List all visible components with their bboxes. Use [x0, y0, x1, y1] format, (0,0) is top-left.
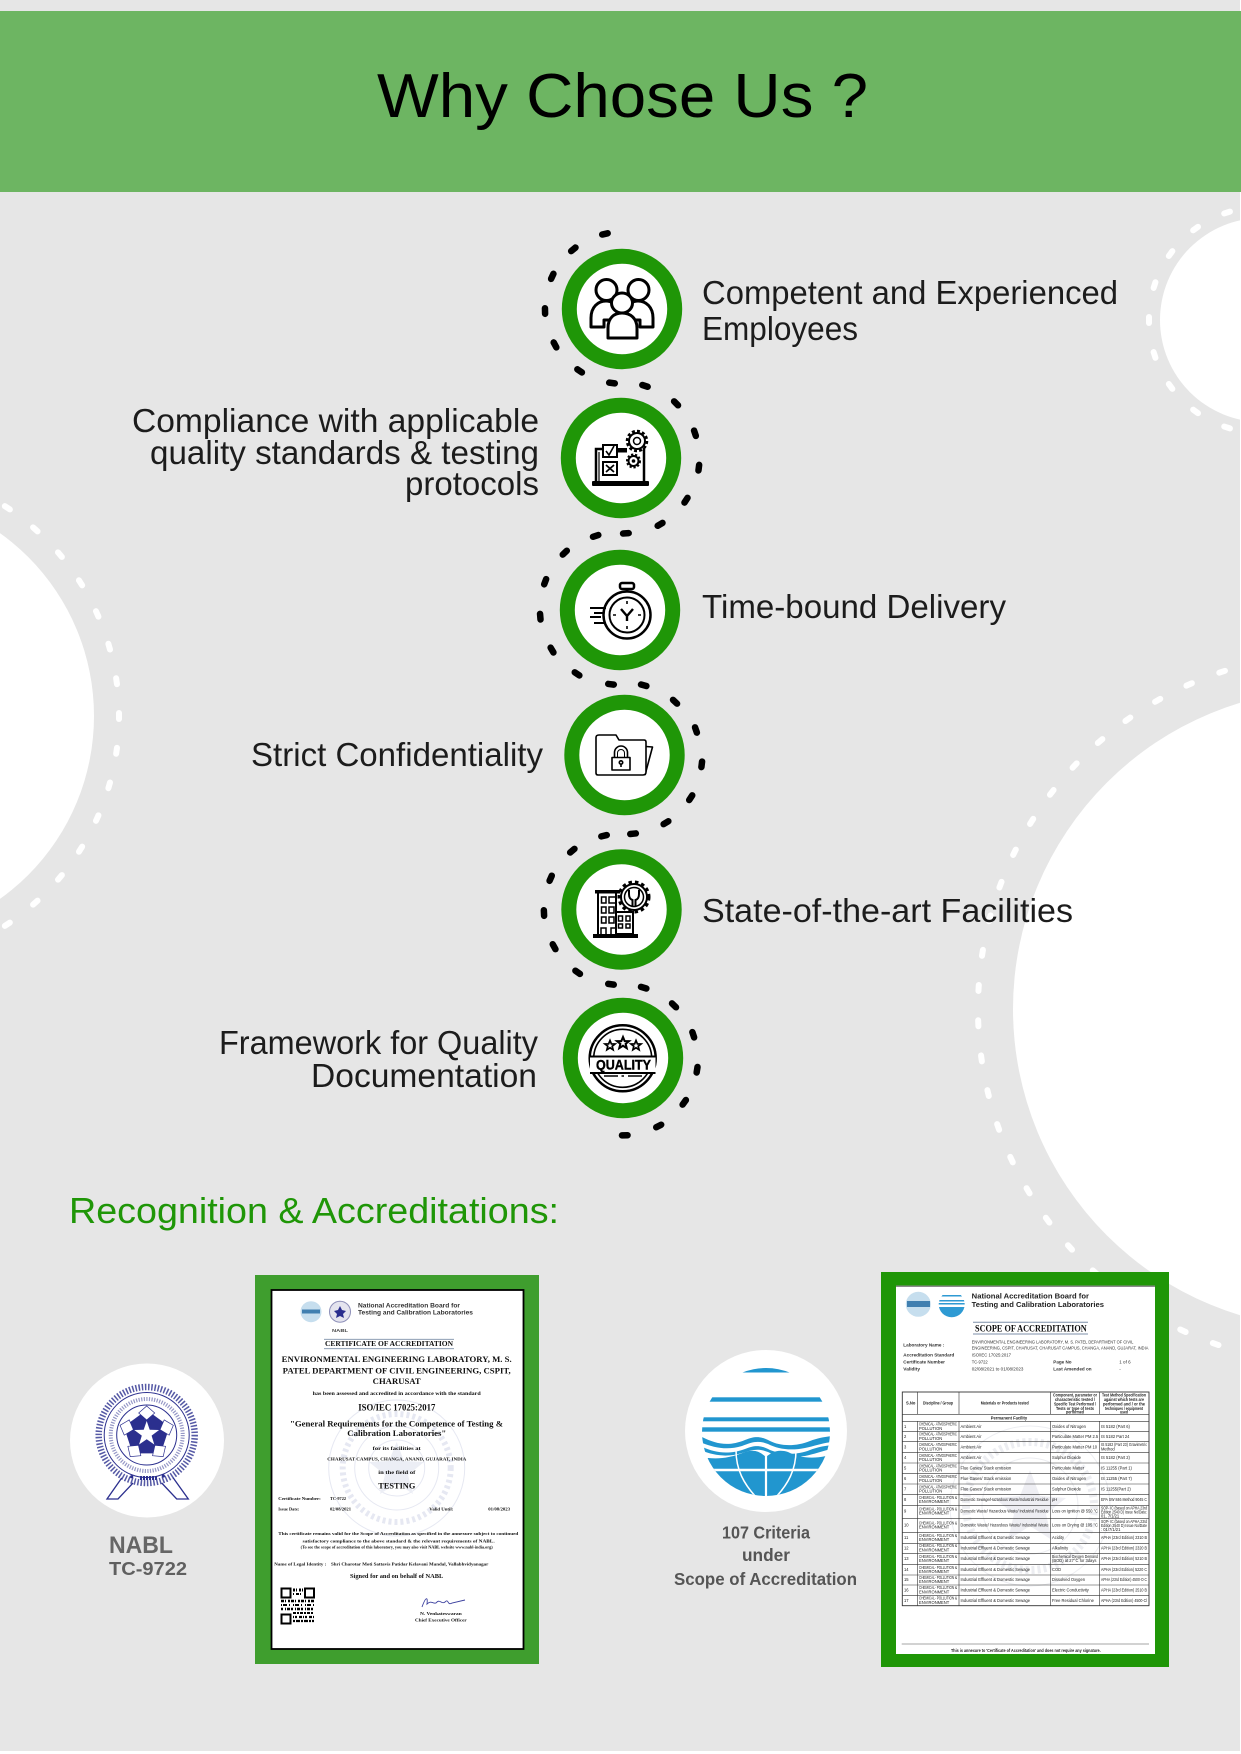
- document table: Industrial Effluent & Domestic Sewage: [960, 1556, 1031, 1561]
- item 6: framework for quality documentation: [219, 987, 698, 1135]
- document table: ENVIRONMENT: [919, 1569, 950, 1574]
- document details: TC-9722: [972, 1360, 988, 1366]
- certificate text: Calibration Laboratories": [347, 1428, 446, 1438]
- icon: green circle 5: [569, 857, 674, 962]
- document table: CHEMICAL- POLLUTION &: [919, 1554, 957, 1559]
- document table: Industrial Effluent & Domestic Sewage: [960, 1588, 1031, 1592]
- item 4: strict confidentiality: [251, 685, 702, 834]
- certificate text: (To see the scope of accreditation of this laboratory, you may also visit NABL website www.nabl-india.org): [301, 1546, 494, 1550]
- signature: [422, 1599, 465, 1607]
- certificate text: Valid Until:: [429, 1507, 454, 1512]
- icon: green circle 1: [569, 256, 675, 362]
- document table: Loss on Drying @ 105 °C: [1052, 1522, 1098, 1528]
- document table: Test Method Specification: [1102, 1392, 1146, 1398]
- document header text: Testing and Calibration Laboratories: [972, 1300, 1104, 1309]
- document table: (BOD) at 27°C for 3days: [1052, 1558, 1096, 1563]
- document table: 15: [904, 1577, 909, 1582]
- label: 107 criteria under scope of accreditation: Scope of Accreditation: [674, 1569, 857, 1589]
- document table: ENVIRONMENT: [919, 1511, 950, 1516]
- document table: CHEMICAL- POLLUTION &: [919, 1506, 957, 1512]
- document table: Particulate Matter PM 2.5: [1052, 1434, 1099, 1439]
- document table: APHA (23rd Edition) 4500-O C: [1101, 1577, 1147, 1582]
- icon: quality stamp: [590, 1025, 656, 1091]
- document table: 6: [904, 1476, 907, 1481]
- document table: Industrial Effluent & Domestic Sewage: [960, 1577, 1031, 1582]
- document table: POLLUTION: [919, 1446, 942, 1451]
- document table: Electric Conductivity: [1052, 1588, 1090, 1592]
- certificate text: Name of Legal Identity :: [274, 1561, 327, 1566]
- document table: Method: [1101, 1446, 1115, 1451]
- label: time-bound delivery: Time-bound Delivery: [702, 588, 1006, 625]
- document table: 13: [904, 1556, 909, 1561]
- label: 107 criteria under scope of accreditation: [674, 1522, 857, 1589]
- document table: Oxides of Nitrogen: [1052, 1476, 1087, 1481]
- document watermark: [950, 1426, 1110, 1586]
- document details: Accreditation Standard: [903, 1353, 954, 1359]
- document table: 2: [904, 1434, 907, 1439]
- icon: green circle 2: [568, 405, 674, 511]
- document table: 01, 7/1/21: [1101, 1513, 1120, 1518]
- certificate text: 02/08/2021: [330, 1507, 351, 1512]
- logo: water and globe: [685, 1350, 847, 1512]
- certificate watermark: [329, 1400, 465, 1536]
- background: top right circle with dashed ring: [1149, 212, 1241, 428]
- heading: recognition and accreditations: Recognition & Accreditations:: [69, 1190, 559, 1231]
- document table: CHEMICAL- POLLUTION &: [919, 1495, 957, 1500]
- document table: CHEMICAL- ATMOSPHERIC: [919, 1484, 957, 1490]
- CPCB logo badge: [674, 1350, 857, 1589]
- certificate text: PATEL DEPARTMENT OF CIVIL ENGINEERING, CSPIT,: [283, 1365, 511, 1375]
- document table: CHEMICAL- ATMOSPHERIC: [919, 1474, 957, 1479]
- item 5: state-of-the-art facilities: [544, 835, 1073, 985]
- document details: ISO/IEC 17025:2017: [972, 1353, 1011, 1359]
- document table: IS 5182 (Part 6): [1101, 1424, 1131, 1429]
- document table: CHEMICAL- ATMOSPHERIC: [919, 1422, 957, 1427]
- document table: 16: [904, 1588, 909, 1592]
- label: NABL: NABL: [109, 1532, 173, 1559]
- certificate text: Issue Date:: [278, 1507, 300, 1512]
- document details: Certificate Number: [903, 1360, 945, 1366]
- item 2: compliance: [132, 385, 699, 534]
- QR code: [281, 1588, 314, 1624]
- document table: ENVIRONMENT: [919, 1524, 950, 1530]
- document table: APHA (23rd Edition) 2510 B: [1101, 1588, 1147, 1592]
- document table: Component, parameter or: [1053, 1392, 1097, 1398]
- certificate of accreditation: [255, 1275, 539, 1664]
- document table: Flue Gases/ Stack emission: [960, 1486, 1012, 1492]
- document table: ENVIRONMENT: [919, 1589, 950, 1594]
- document details: Laboratory Name :: [903, 1343, 945, 1349]
- icon: dashed ring 5: [544, 835, 614, 985]
- label: framework for quality documentation: Framework for Quality: [219, 1024, 538, 1061]
- document table: S.No: [906, 1400, 916, 1406]
- document details: ENVIRONMENTAL ENGINEERING LABORATORY, M. S. PATEL DEPARTMENT OF CIVIL: [972, 1339, 1134, 1345]
- document table: ENVIRONMENT: [919, 1558, 950, 1563]
- document table: 17: [904, 1598, 909, 1603]
- document table: IS 5182 (Part 2): [1101, 1455, 1131, 1460]
- icon: green circle 6: [570, 1005, 676, 1111]
- document table: POLLUTION: [919, 1426, 942, 1431]
- label: competent employees: Competent and Experienced: [702, 274, 1118, 311]
- certificate text: Chief Executive Officer: [415, 1618, 467, 1623]
- document table: 3: [904, 1444, 907, 1450]
- certificate text: This certificate remains valid for the Scope of Accreditation as specified in the annexure subject to continued: [278, 1531, 519, 1536]
- logo: NABL emblem: [70, 1364, 224, 1518]
- scope of accreditation document: [881, 1272, 1169, 1667]
- document table: CHEMICAL- POLLUTION &: [919, 1585, 957, 1590]
- icon: checklist laptop with gears: [592, 431, 649, 486]
- document table: against which tests are: [1104, 1397, 1145, 1402]
- certificate text: TC-9722: [330, 1496, 346, 1501]
- label: 107 criteria under scope of accreditation: 107 Criteria: [722, 1522, 810, 1542]
- certificate text: [274, 1303, 519, 1623]
- document table: techniques / equipment: [1105, 1406, 1144, 1411]
- document table: Specific Test Performed /: [1054, 1402, 1097, 1406]
- document table: 7: [904, 1486, 907, 1492]
- document table: APHA (23rd Edition) 2320 B: [1101, 1546, 1147, 1550]
- document table: CHEMICAL- ATMOSPHERIC: [919, 1453, 957, 1458]
- title: Why Chose Us ?: [377, 62, 868, 131]
- certificate text: Signed for and on behalf of NABL: [350, 1574, 443, 1580]
- document table: performed: [1066, 1410, 1084, 1415]
- document table: Flue Gases/ Stack emission: [960, 1476, 1012, 1481]
- document table: CHEMICAL- POLLUTION &: [919, 1575, 957, 1580]
- document table: 8: [904, 1497, 907, 1502]
- document table: CHEMICAL- ATMOSPHERIC: [919, 1442, 957, 1447]
- label: 107 criteria under scope of accreditation: under: [742, 1545, 790, 1565]
- certificate text: has been assessed and accredited in accordance with the standard: [313, 1391, 481, 1397]
- label: strict confidentiality: Strict Confidentiality: [251, 736, 543, 773]
- document table: Tests or type of tests: [1056, 1406, 1095, 1411]
- icon: dashed ring 6: [622, 987, 698, 1135]
- document table: Edition 2540 D) Issue No/Date: [1101, 1523, 1148, 1528]
- document table: [902, 1392, 1149, 1606]
- document details: Page No: [1053, 1360, 1072, 1366]
- document table: CHEMICAL- ATMOSPHERIC: [919, 1432, 957, 1437]
- document table: Industrial Effluent & Domestic Sewage: [960, 1567, 1031, 1572]
- document table: Dissolved Oxygen: [1052, 1577, 1086, 1582]
- certificate text: satisfactory compliance to the above standard & the relevant requirements of NABL.: [303, 1538, 495, 1543]
- document table: CHEMICAL- POLLUTION &: [919, 1565, 957, 1570]
- document table: Permanent Facility: [991, 1415, 1028, 1420]
- document table: Ambient Air: [960, 1434, 982, 1439]
- icon: dashed ring 4: [630, 685, 702, 834]
- background: left circle with dashed ring: [0, 491, 119, 941]
- icon: stopwatch: [590, 583, 650, 638]
- document table: Domestic Waste/ Hazardous Waste/ Industrial Residue: [960, 1508, 1049, 1514]
- certificate text: for its facilities at: [373, 1446, 421, 1452]
- document table: ENVIRONMENT: [919, 1547, 950, 1552]
- background: right large circle with dashed ring: [978, 671, 1241, 1345]
- document table: 4: [904, 1455, 907, 1460]
- certificate text: CHARUSAT: [373, 1376, 421, 1386]
- icon: green circle 4: [572, 702, 677, 808]
- document details: 1 of 6: [1119, 1360, 1131, 1366]
- document header text: [972, 1292, 1104, 1334]
- document table: Free Residual Chlorine: [1052, 1598, 1095, 1603]
- certificate text: TESTING: [378, 1481, 416, 1491]
- label: TC-9722: TC-9722: [109, 1558, 187, 1579]
- document table: characteristic tested /: [1055, 1397, 1096, 1402]
- document table: Domestic Sewage/Hazardous Waste/Industrial Residue: [960, 1497, 1049, 1502]
- document header text: SCOPE OF ACCREDITATION: [975, 1324, 1087, 1334]
- document table: APHA (23rd Edition) 4500-Cl: [1101, 1598, 1147, 1603]
- document table: COD: [1052, 1567, 1061, 1572]
- document table: : 01/7/1/21: [1101, 1527, 1121, 1532]
- document table: used: [1120, 1410, 1128, 1415]
- document table: APHA (23rd Edition) 5210 B: [1101, 1556, 1147, 1561]
- document table: Discipline / Group: [923, 1400, 953, 1406]
- label: compliance: Compliance with applicable: [132, 402, 539, 439]
- document details: Validity: [903, 1367, 920, 1373]
- document table: ENVIRONMENT: [919, 1600, 950, 1605]
- certificate text: 01/08/2023: [488, 1507, 510, 1512]
- icon: quality stamp: QUALITY: [596, 1056, 652, 1072]
- document table: Ambient Air: [960, 1424, 982, 1429]
- document footer note: This is annexure to 'Certificate of Accreditation' and does not require any signature.: [951, 1648, 1101, 1653]
- certificate text: ENVIRONMENTAL ENGINEERING LABORATORY, M. S.: [282, 1354, 512, 1364]
- document table: Industrial Effluent & Domestic Sewage: [960, 1546, 1031, 1550]
- document table: SOP- IC (based on APHA 23rd: [1101, 1506, 1148, 1511]
- document table: EPA SW 846 Method 9045 C: [1101, 1497, 1147, 1502]
- document details: ENGINEERING, CSPIT, CHARUSAT, CHARUSAT CAMPUS, CHANGA, ANAND, GUJARAT, INDIA: [972, 1345, 1149, 1351]
- label: competent employees: [702, 274, 1118, 347]
- document table: 11: [904, 1535, 909, 1540]
- document table: Industrial Effluent & Domestic Sewage: [960, 1535, 1031, 1540]
- certificate text: "General Requirements for the Competence of Testing &: [290, 1419, 503, 1429]
- document table: APHA (23rd Edition) 2310 B: [1101, 1535, 1147, 1540]
- certificate text: ISO/IEC 17025:2017: [358, 1403, 436, 1413]
- document table: Particulate Matter PM 10: [1052, 1444, 1098, 1450]
- label: compliance: quality standards & testing: [150, 434, 539, 471]
- document table: Industrial Effluent & Domestic Sewage: [960, 1598, 1031, 1603]
- document table: performed and / or the: [1103, 1402, 1146, 1406]
- document table: IS 11255 (Part 1): [1101, 1466, 1133, 1470]
- document table: Ambient Air: [960, 1444, 982, 1450]
- document table: SOP- IC (based on APHA 23rd: [1101, 1519, 1148, 1524]
- document table: CHEMICAL- POLLUTION &: [919, 1533, 957, 1538]
- document table: Oxides of Nitrogen: [1052, 1424, 1087, 1429]
- document table: POLLUTION: [919, 1468, 942, 1472]
- document header text: National Accreditation Board for: [972, 1292, 1089, 1301]
- document table: APHA (23rd Edition) 5220 C: [1101, 1567, 1147, 1572]
- icon: people: [591, 280, 653, 338]
- document table: 10: [904, 1522, 909, 1528]
- document table: POLLUTION: [919, 1489, 942, 1494]
- document table: IS 11255(Part 2): [1101, 1486, 1131, 1492]
- label: competent employees: Employees: [702, 310, 858, 347]
- document table: IS 5182 Part 24: [1101, 1434, 1130, 1439]
- document table: 1: [904, 1424, 907, 1429]
- document table: CHEMICAL- POLLUTION &: [919, 1596, 957, 1601]
- certificate text: CERTIFICATE OF ACCREDITATION: [325, 1340, 453, 1348]
- certificate text: CHARUSAT CAMPUS, CHANGA, ANAND, GUJARAT, INDIA: [327, 1457, 467, 1462]
- document details: -: [1119, 1368, 1121, 1373]
- document table: 14: [904, 1567, 909, 1572]
- document table: Loss on Ignition @ 550 °C: [1052, 1508, 1098, 1514]
- document table: ENVIRONMENT: [919, 1537, 950, 1542]
- item 1: competent employees: [545, 233, 1118, 383]
- label: framework for quality documentation: Documentation: [311, 1057, 537, 1094]
- document table: POLLUTION: [919, 1436, 942, 1441]
- document logos: [906, 1292, 966, 1318]
- label: state-of-the-art facilities: State-of-the-art Facilities: [702, 892, 1073, 929]
- document table: Materials or Products tested: [981, 1400, 1029, 1406]
- certificate logos: [300, 1301, 350, 1333]
- document table: Ambient Air: [960, 1455, 982, 1460]
- document details: Last Amended on: [1053, 1367, 1092, 1373]
- icon: dashed ring 1: [545, 233, 615, 383]
- document table: 12: [904, 1546, 909, 1550]
- icon: locked folder: [596, 735, 652, 775]
- certificate text: N. Venkateswaran: [420, 1611, 462, 1616]
- document table: Sulphur Dioxide: [1052, 1455, 1082, 1460]
- certificate text: Testing and Calibration Laboratories: [358, 1310, 474, 1316]
- document table: Edition 2540 D) Issue No/Date:: [1101, 1510, 1147, 1514]
- label: compliance: protocols: [405, 465, 539, 502]
- document table: Acidity: [1052, 1535, 1065, 1540]
- icon: building with gear: [593, 882, 649, 938]
- document table: 5: [904, 1466, 907, 1470]
- document table: ENVIRONMENT: [919, 1579, 950, 1584]
- document table: CHEMICAL- ATMOSPHERIC: [919, 1463, 957, 1468]
- document table: 9: [904, 1508, 907, 1514]
- document table: IS 11255 (Part 7): [1101, 1476, 1133, 1481]
- icon: dashed ring 3: [540, 535, 614, 685]
- label: compliance: [132, 402, 539, 502]
- document table: Particulate Matter: [1052, 1466, 1085, 1470]
- document table: Sulphur Dioxide: [1052, 1486, 1082, 1492]
- document table: POLLUTION: [919, 1457, 942, 1462]
- document details: [903, 1339, 1149, 1373]
- document table: Domestic Waste/ Hazardous Waste/ Industrial Waste: [960, 1522, 1049, 1528]
- certificate logos: NABL: [332, 1328, 348, 1333]
- header band: [0, 11, 1241, 192]
- item 3: time-bound delivery: [540, 535, 1006, 685]
- document table: IS 5182 (Part 23) Gravimetric: [1101, 1442, 1147, 1447]
- certificate text: Certificate Number:: [278, 1496, 321, 1501]
- icon: dashed ring 2: [623, 385, 699, 534]
- document details: 02/08/2021 to 01/08/2023: [972, 1367, 1024, 1373]
- document table: POLLUTION: [919, 1478, 942, 1483]
- NABL badge: [70, 1364, 224, 1579]
- label: framework for quality documentation: [219, 1024, 538, 1094]
- certificate text: National Accreditation Board for: [358, 1303, 461, 1309]
- document table: Alkalinity: [1052, 1546, 1069, 1550]
- document table: ENVIRONMENT: [919, 1499, 950, 1504]
- certificate text: Shri Charotar Moti Sattavis Patidar Kelavani Mandal, Vallabhvidyanagar: [331, 1561, 488, 1566]
- certificate text: in the field of: [378, 1470, 415, 1476]
- document table: CHEMICAL- POLLUTION &: [919, 1543, 957, 1548]
- document table: Biochemical Oxygen Demand: [1052, 1554, 1099, 1559]
- document table: pH: [1052, 1497, 1057, 1502]
- icon: green circle 3: [567, 557, 673, 663]
- document table: Flue Gases/ Stack emission: [960, 1466, 1012, 1470]
- document table: CHEMICAL- POLLUTION &: [919, 1520, 957, 1525]
